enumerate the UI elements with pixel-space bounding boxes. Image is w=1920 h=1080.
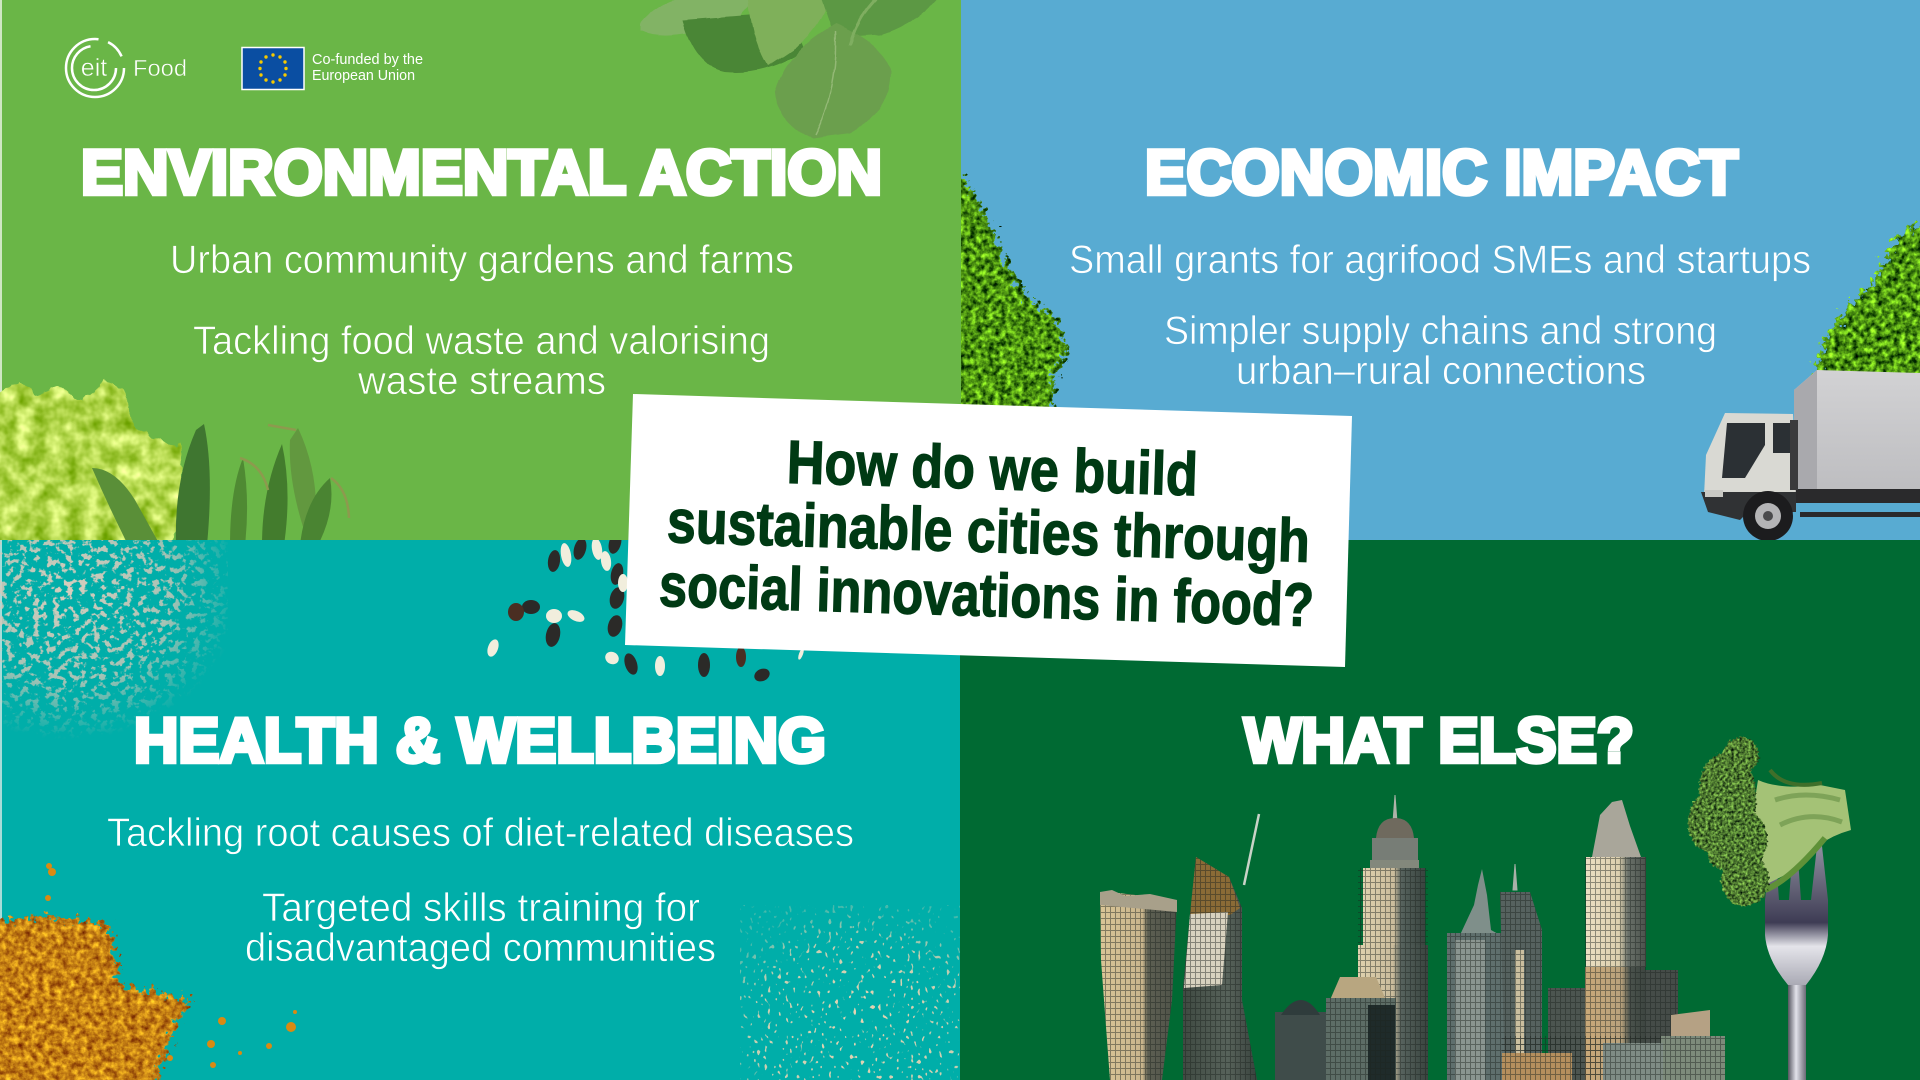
panel: economic impact — [950, 0, 1920, 541]
panel: what else — [960, 540, 1920, 1080]
heading: environmental action: ENVIRONMENTAL ACTION — [81, 138, 882, 208]
text: food waste: Tackling food waste and valorising — [193, 319, 770, 363]
image: green beans — [92, 424, 349, 545]
callout: central question card — [625, 394, 1352, 667]
logo: EIT Food: Food — [133, 55, 187, 81]
panel: health and wellbeing — [0, 531, 960, 1080]
text: food waste: waste streams — [357, 359, 606, 403]
logo: EIT Food: eit — [81, 54, 107, 82]
image: flour — [0, 540, 228, 740]
image: lettuce — [0, 380, 184, 545]
image: fork — [1765, 846, 1828, 1080]
image: right tree — [1812, 216, 1920, 385]
heading: central question — [658, 424, 1319, 639]
text: skills training: disadvantaged communities — [245, 926, 716, 970]
image: seeds — [485, 531, 805, 684]
text: skills training: Targeted skills training for — [262, 886, 700, 930]
logo: EIT Food — [66, 39, 187, 97]
text: small grants: Small grants for agrifood SMEs and startups — [1069, 238, 1811, 282]
heading: health and wellbeing: HEALTH & WELLBEING — [134, 706, 826, 776]
text: diet-related diseases: Tackling root causes of diet-related diseases — [107, 811, 854, 855]
heading: central question: social innovations in food? — [658, 551, 1315, 639]
image: truck — [1701, 370, 1920, 541]
text: supply chains — [1166, 315, 1714, 384]
text: co-funded by the European Union — [312, 51, 423, 84]
logo: EU flag — [242, 48, 304, 90]
image: broccoli — [1688, 737, 1851, 906]
image: left tree — [961, 174, 1070, 407]
heading: economic impact: ECONOMIC IMPACT — [1145, 138, 1738, 208]
image: spinach leaves — [640, 0, 940, 139]
heading: what else: WHAT ELSE? — [1244, 706, 1634, 776]
text: co-funded by the European Union: European Union — [312, 67, 415, 84]
text: co-funded by the European Union: Co-funded by the — [312, 51, 423, 68]
text: skills training — [245, 886, 716, 970]
heading: central question: sustainable cities through — [666, 487, 1311, 575]
text: urban gardens: Urban community gardens and farms — [170, 238, 794, 282]
heading: central question: How do we build — [786, 428, 1199, 508]
text: food waste — [194, 325, 768, 394]
image: city skyline — [1100, 795, 1725, 1080]
image: turmeric — [0, 863, 297, 1080]
text: supply chains: urban–rural connections — [1236, 349, 1646, 393]
panel: environmental action — [0, 0, 961, 545]
text: supply chains: Simpler supply chains and strong — [1164, 309, 1717, 353]
image: rice grains — [740, 905, 960, 1080]
